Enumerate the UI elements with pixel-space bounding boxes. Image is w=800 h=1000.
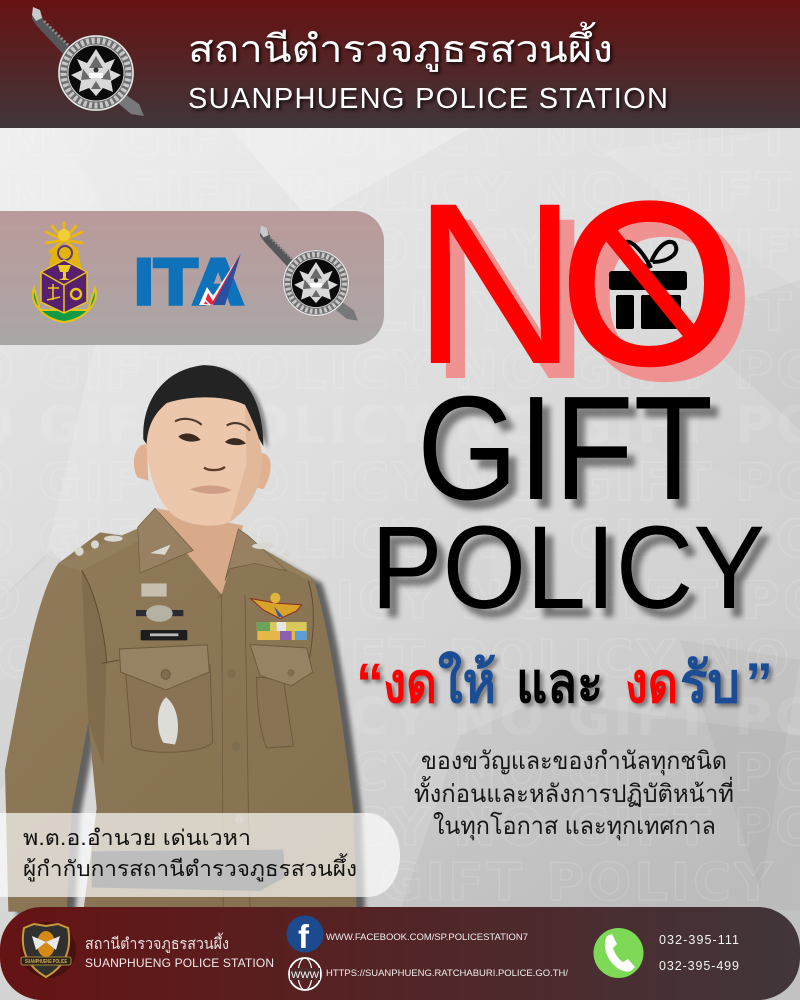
phone number two: 032-395-499	[659, 959, 739, 973]
header title English: SUANPHUENG POLICE STATION	[188, 83, 668, 115]
shoulder rank insignia	[75, 536, 290, 557]
slogan: no giving and no receiving: ”	[745, 651, 773, 714]
NO shadow: O	[575, 170, 754, 427]
chest badges	[136, 583, 187, 640]
heading: POLICY: POLICY	[371, 502, 765, 634]
person: officer portrait	[5, 365, 365, 916]
icon: gift box	[609, 242, 687, 329]
icon: website globe: WWW	[291, 970, 319, 981]
footer station name English: SUANPHUENG POLICE STATION	[85, 956, 274, 970]
nose and mouth	[204, 467, 225, 470]
heading: GIFT: GIFT	[417, 366, 713, 531]
description text: ในทุกโอกาส และทุกเทศกาล	[433, 812, 716, 841]
facebook url: WWW.FACEBOOK.COM/SP.POLICESTATION7	[326, 932, 528, 943]
slogan: no giving and no receiving: รับ	[680, 651, 740, 714]
slogan: no giving and no receiving: งด	[383, 651, 437, 714]
slogan: no giving and no receiving: และ	[516, 651, 603, 714]
officer name: พ.ต.อ.อำนวย เด่นเวหา	[23, 826, 251, 850]
panel: logos	[0, 211, 384, 345]
emblem: police logo in panel	[260, 225, 358, 321]
face	[147, 397, 262, 526]
uniform body	[5, 528, 365, 916]
icon: station badge: SUANPHUENG POLICE	[25, 959, 67, 965]
description text: ของขวัญและของกำนัลทุกชนิด	[421, 748, 727, 776]
NO letters: O	[560, 155, 739, 412]
right pocket	[250, 644, 313, 748]
icon: facebook: f	[298, 918, 310, 955]
belt	[92, 850, 285, 891]
NO letters: N	[412, 155, 578, 412]
heading: NO with gift icon	[412, 155, 754, 427]
icon: station badge	[20, 922, 76, 978]
slogan: no giving and no receiving: “	[356, 651, 384, 714]
slogan: no giving and no receiving: ให้	[438, 650, 496, 714]
description text: ทั้งก่อนและหลังการปฏิบัติหน้าที่	[414, 776, 734, 808]
header title Thai: สถานีตำรวจภูธรสวนผึ้ง	[188, 21, 613, 72]
collar left	[138, 508, 193, 573]
shirt placket and buttons	[217, 594, 250, 912]
collar right	[225, 529, 287, 581]
slogan: no giving and no receiving	[356, 650, 773, 714]
hair	[143, 365, 263, 446]
slogan: no giving and no receiving: งด	[625, 651, 678, 714]
phone number one: 032-395-111	[659, 933, 739, 947]
footer bar	[0, 907, 800, 1000]
website url: HTTPS://SUANPHUENG.RATCHABURI.POLICE.GO.TH/	[326, 968, 568, 979]
eyebrows and eyes	[175, 419, 250, 431]
icon: phone	[594, 928, 644, 978]
caption box	[0, 813, 400, 897]
prohibition slash	[612, 236, 688, 330]
officer position: ผู้กำกับการสถานีตำรวจภูธรสวนผึ้ง	[23, 853, 357, 882]
description text	[414, 748, 734, 841]
ears	[134, 444, 271, 489]
neck	[157, 508, 243, 594]
left pocket	[119, 645, 213, 752]
icon: website globe	[289, 958, 321, 990]
NO shadow: N	[427, 170, 593, 427]
footer station name Thai: สถานีตำรวจภูธรสวนผึ้ง	[85, 932, 229, 954]
icon: facebook	[286, 916, 324, 955]
icon: ITA logo: ITA	[134, 245, 244, 318]
header bar	[0, 0, 800, 128]
icon: royal thai police crest	[33, 223, 96, 322]
wings and ribbon bars	[251, 593, 307, 640]
emblem: header police logo	[32, 7, 144, 116]
